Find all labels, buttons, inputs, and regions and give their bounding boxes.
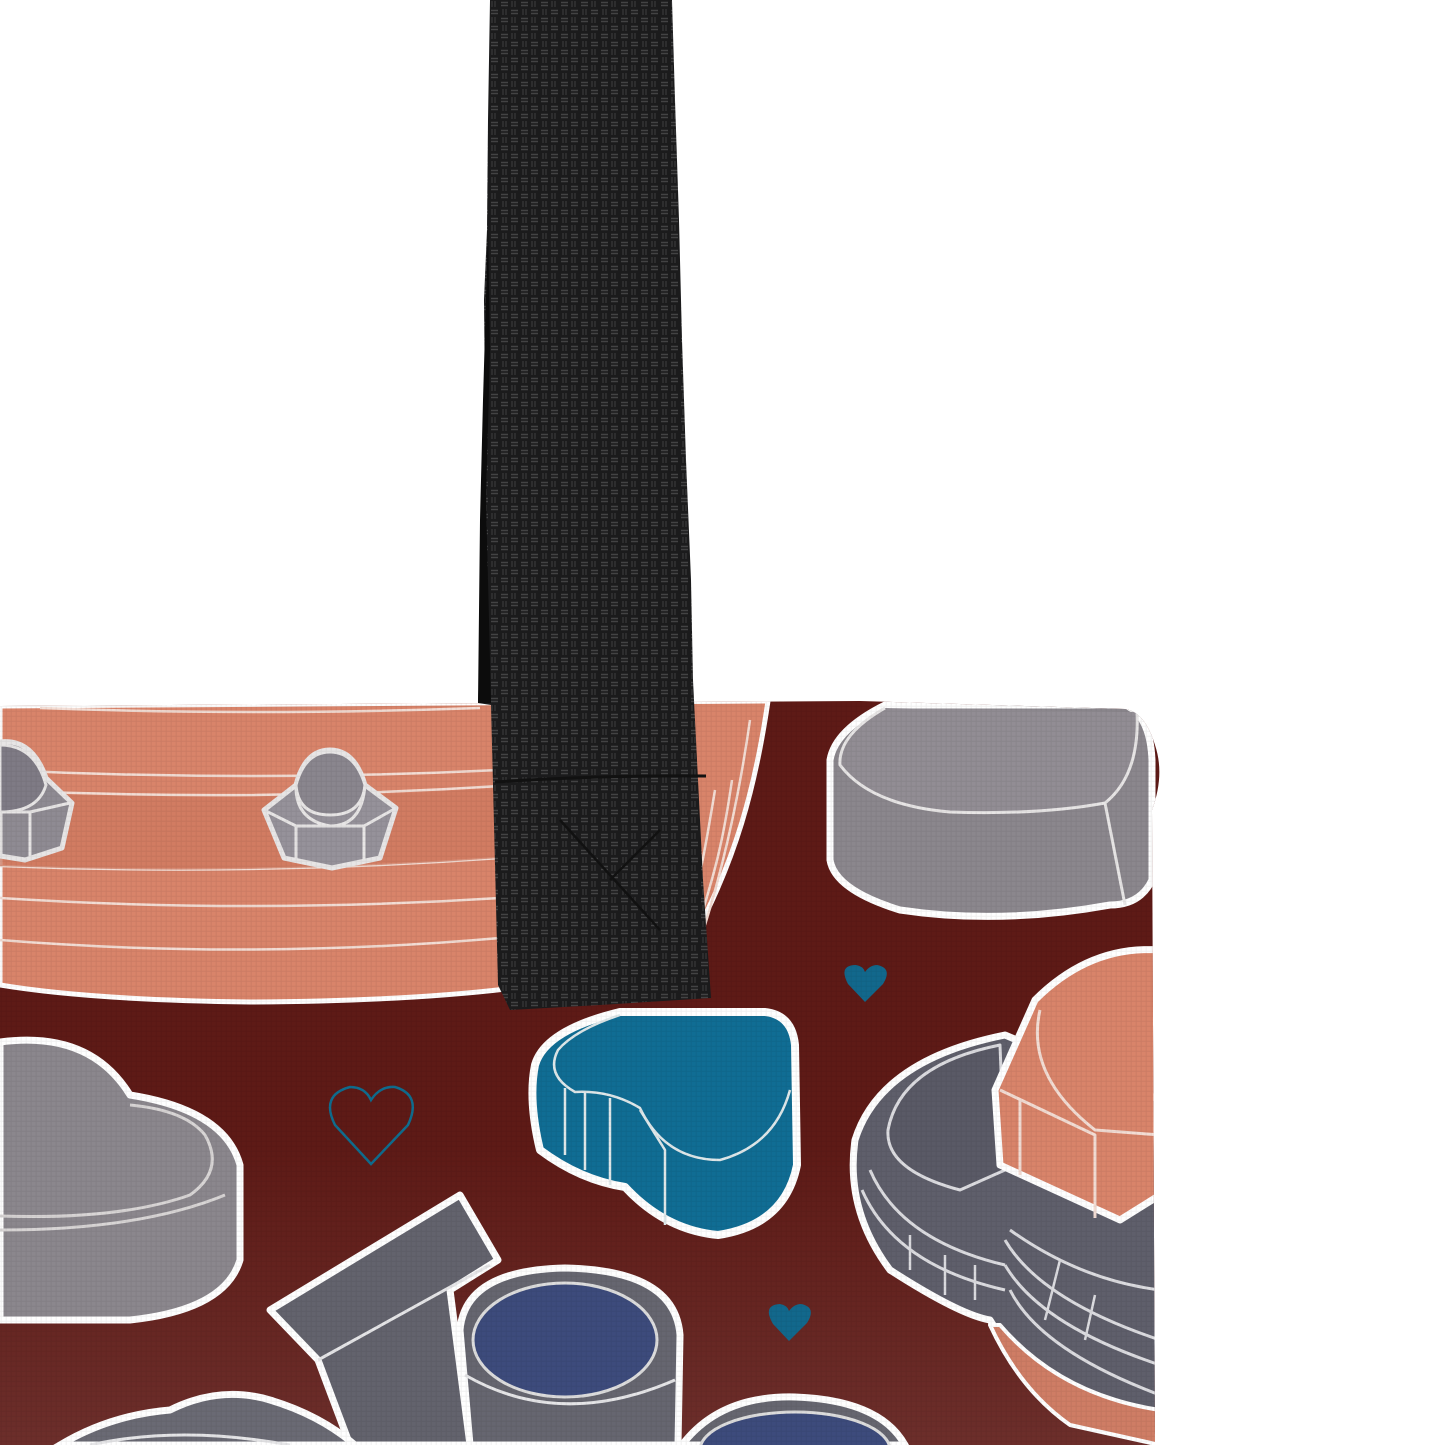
grey hex nut centre bbox=[264, 750, 396, 868]
outline heart bbox=[330, 1087, 413, 1164]
blue heart box bbox=[532, 1012, 797, 1235]
salmon heart box right bbox=[995, 950, 1160, 1220]
small blue heart top bbox=[844, 965, 887, 1002]
salmon ring band bbox=[0, 701, 768, 1002]
strap shadow edge bbox=[478, 230, 491, 703]
fabric texture bbox=[0, 690, 1170, 1445]
panel: tote bag fabric bbox=[0, 690, 1170, 1445]
grey stacked coins right bbox=[853, 1035, 1160, 1445]
grey heart box left bbox=[0, 1040, 240, 1320]
strap stitching bbox=[495, 776, 706, 782]
grey shape bottom left bbox=[60, 1394, 355, 1445]
strap: black woven handle bbox=[478, 0, 711, 1010]
grey heart box top right bbox=[830, 705, 1152, 916]
blue cylinder bottom bbox=[682, 1397, 905, 1445]
grey block and cylinder bbox=[270, 1195, 680, 1445]
small blue heart bottom bbox=[769, 1304, 811, 1341]
grey hex nut left bbox=[0, 742, 72, 860]
